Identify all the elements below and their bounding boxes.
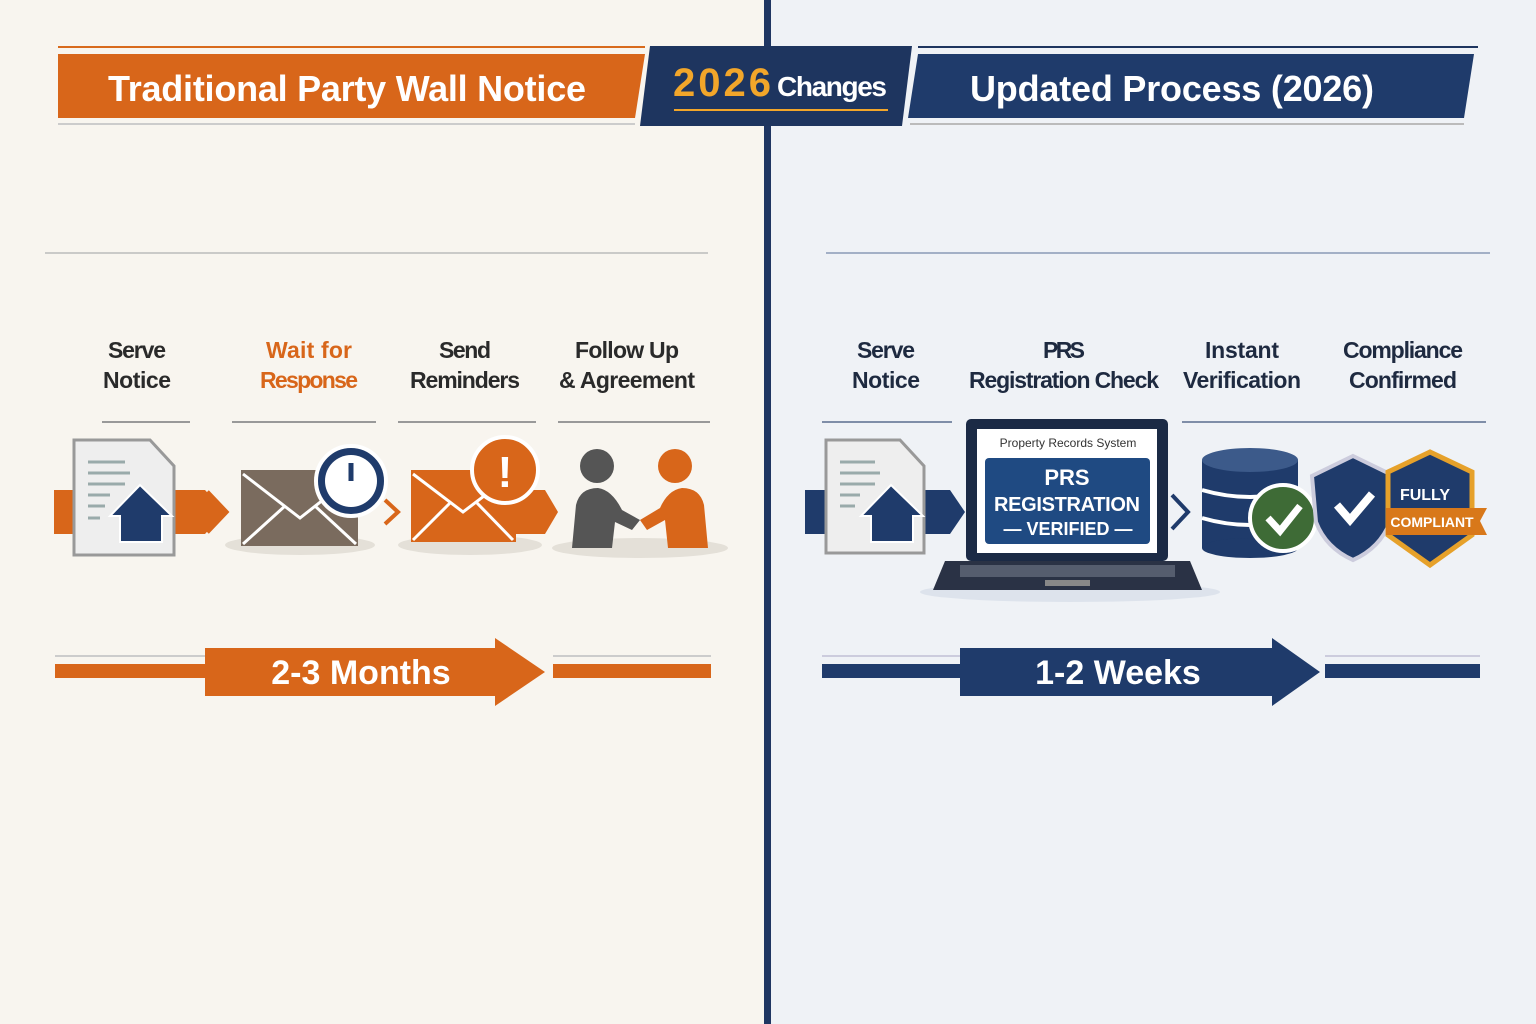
right icons: laptop xyxy=(920,419,1220,602)
left step labels xyxy=(103,337,695,393)
header: updated: Updated Process (2026) xyxy=(970,68,1374,109)
left icons: wait envelope clock xyxy=(225,446,398,555)
header: 2026 changes xyxy=(640,46,912,126)
left step labels: Serve xyxy=(108,337,166,363)
right step labels: Registration Check xyxy=(969,367,1159,393)
right icons: laptop: PRS xyxy=(1044,465,1090,490)
right timeline xyxy=(822,638,1480,706)
right step labels: Compliance xyxy=(1343,337,1463,363)
header: 2026 changes: Changes xyxy=(777,71,887,102)
left step labels: Reminders xyxy=(410,367,520,393)
right step labels xyxy=(852,337,1463,393)
right icons: shield xyxy=(1312,456,1394,560)
left step labels: & Agreement xyxy=(559,367,695,393)
header: 2026 changes: 2026 xyxy=(673,61,771,105)
right step labels: Instant xyxy=(1205,337,1279,363)
left step labels: Send xyxy=(439,337,491,363)
left step labels: Notice xyxy=(103,367,171,393)
left step labels: Response xyxy=(260,367,358,393)
right timeline: 1-2 Weeks xyxy=(1035,654,1201,692)
right step labels: PRS xyxy=(1043,337,1085,363)
right step labels: Verification xyxy=(1183,367,1301,393)
right step labels: Serve xyxy=(857,337,915,363)
left icons: handshake xyxy=(552,449,728,558)
right icons: laptop: REGISTRATION xyxy=(994,494,1140,516)
right icons: laptop: — VERIFIED — xyxy=(1003,519,1133,539)
divider xyxy=(764,0,771,1024)
header: traditional: Traditional Party Wall Notice xyxy=(108,68,586,109)
right icons: compliant badge xyxy=(1386,452,1487,565)
left timeline: 2-3 Months xyxy=(271,654,451,692)
header: updated xyxy=(908,47,1478,124)
left icons: reminders xyxy=(398,437,558,555)
right icons: compliant badge: COMPLIANT xyxy=(1390,514,1474,530)
right step labels: Confirmed xyxy=(1349,367,1457,393)
left step labels: Wait for xyxy=(266,337,352,363)
header: traditional xyxy=(58,47,645,124)
left icons: reminders: ! xyxy=(498,448,512,497)
right icons: compliant badge: FULLY xyxy=(1400,487,1450,504)
left step labels: Follow Up xyxy=(575,337,679,363)
left icons: serve notice xyxy=(54,440,226,555)
left timeline xyxy=(55,638,711,706)
right icons: serve notice xyxy=(805,440,965,553)
right step labels: Notice xyxy=(852,367,920,393)
right icons: laptop: Property Records System xyxy=(1000,436,1136,450)
right icons: database check xyxy=(1202,448,1316,558)
